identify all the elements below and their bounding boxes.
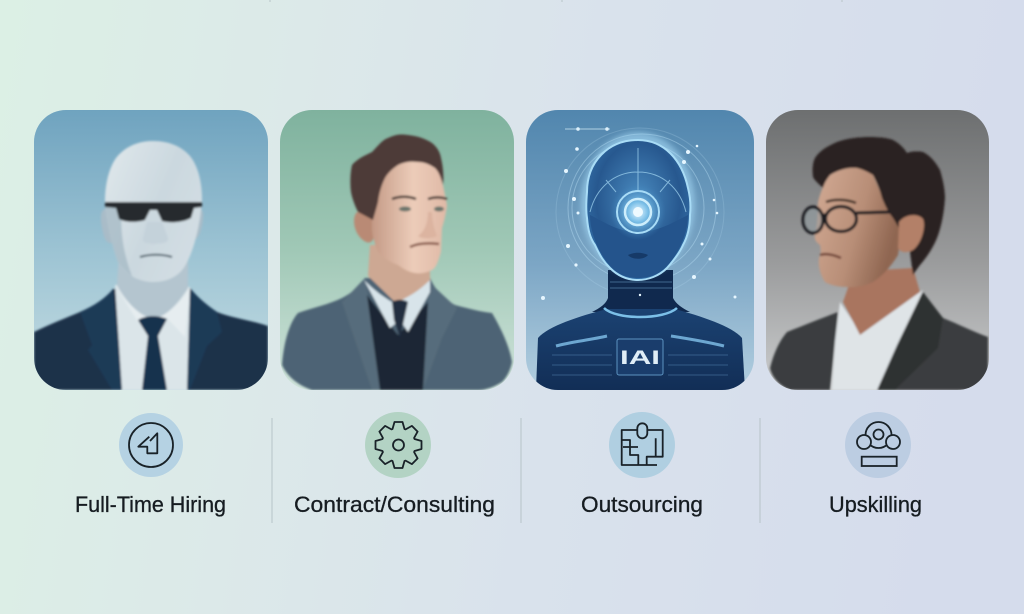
hair bbox=[813, 137, 945, 275]
neck bbox=[368, 245, 430, 305]
nose and mouth bbox=[152, 224, 167, 242]
brow and mouth bbox=[826, 200, 856, 203]
glasses bbox=[803, 206, 890, 233]
brows and eyes bbox=[392, 197, 447, 199]
jacket bbox=[34, 288, 268, 390]
badge: IAI bbox=[617, 339, 663, 375]
heading: upskilling: Upskilling bbox=[829, 492, 922, 517]
neck bbox=[117, 262, 188, 318]
panel: outsourcing AI figure bbox=[526, 110, 754, 390]
panel: upskilling portrait bbox=[766, 110, 989, 390]
mouth bbox=[410, 243, 439, 247]
bald head bbox=[105, 141, 202, 282]
panel: full-time hiring portrait bbox=[34, 110, 268, 390]
icon: upskilling bbox=[845, 412, 911, 478]
head glow bbox=[581, 132, 695, 276]
jacket bbox=[770, 312, 838, 390]
panel: contract/consulting portrait bbox=[280, 110, 514, 390]
badge: IAI: IAI bbox=[620, 348, 660, 369]
collar bbox=[364, 280, 430, 332]
shirt bbox=[115, 285, 190, 390]
head bbox=[586, 140, 690, 280]
shirt bbox=[832, 290, 923, 390]
icon: gear bbox=[365, 412, 431, 478]
ears bbox=[101, 209, 203, 243]
sunglasses bbox=[105, 202, 202, 222]
halo rings bbox=[556, 128, 724, 296]
necktie bbox=[138, 316, 167, 390]
neck bbox=[843, 268, 920, 335]
icon: outsourcing bbox=[609, 412, 675, 478]
ear bbox=[898, 215, 924, 252]
body bbox=[536, 309, 745, 390]
data points bbox=[541, 127, 736, 300]
vest bbox=[367, 295, 428, 390]
sensor eye bbox=[614, 190, 662, 238]
neck bbox=[592, 270, 690, 312]
heading: outsourcing: Outsourcing bbox=[581, 492, 703, 517]
nose shade bbox=[418, 212, 437, 238]
jacket bbox=[282, 278, 512, 390]
lower face bbox=[590, 215, 688, 278]
head circuit lines bbox=[590, 148, 686, 212]
collar bbox=[129, 290, 190, 334]
ear bbox=[354, 212, 374, 243]
face bbox=[815, 168, 900, 287]
top edge ticks bbox=[270, 0, 842, 2]
face bbox=[372, 158, 447, 273]
hair bbox=[350, 134, 443, 220]
heading: contract/consulting: Contract/Consulting bbox=[294, 492, 495, 517]
column dividers bbox=[272, 418, 760, 523]
icon: full-time hiring bbox=[119, 413, 183, 477]
lapels bbox=[344, 279, 379, 388]
heading: full-time hiring: Full-Time Hiring bbox=[75, 492, 226, 517]
necktie bbox=[392, 300, 408, 338]
